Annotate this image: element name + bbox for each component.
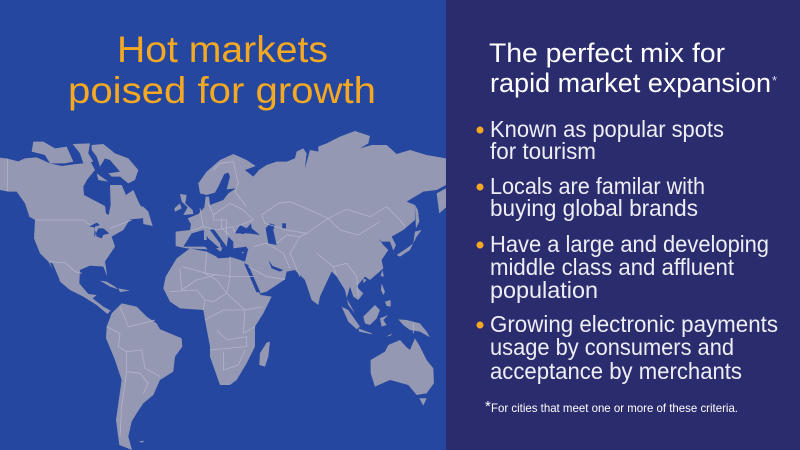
footnote: * <box>485 398 491 415</box>
bullet: electronic payments <box>476 311 778 384</box>
bullet: electronic payments: Growing electronic payments <box>490 311 778 337</box>
bullet: electronic payments: usage by consumers and <box>490 334 734 360</box>
title: poised for growth <box>68 70 376 111</box>
heading: perfect mix: * <box>772 73 777 88</box>
bullet: tourism: for tourism <box>490 138 596 164</box>
land masses <box>0 131 446 450</box>
mediterranean islands <box>204 232 244 253</box>
bullet: middle class <box>476 231 769 303</box>
country borders <box>7 159 413 437</box>
footnote: For cities that meet one or more of these criteria. <box>491 401 738 415</box>
bullet: global brands <box>476 173 705 221</box>
heading: perfect mix: The perfect mix for <box>489 38 725 68</box>
heading: perfect mix <box>489 38 777 98</box>
world map <box>0 131 446 450</box>
panel: left map background <box>0 0 446 450</box>
panel: right criteria background <box>446 0 800 450</box>
bullet: global brands: Locals are familar with <box>490 173 705 199</box>
bullet: middle class: middle class and affluent <box>490 254 735 280</box>
bullet: tourism <box>476 116 724 164</box>
bullet: global brands: buying global brands <box>490 195 698 221</box>
water bodies <box>50 223 286 293</box>
bullet: electronic payments: acceptance by merchants <box>490 358 742 384</box>
bullet: middle class: population <box>490 277 598 303</box>
title: Hot markets <box>117 29 328 70</box>
bullet: middle class: Have a large and developing <box>490 231 769 257</box>
title <box>68 29 376 111</box>
bullet: tourism: Known as popular spots <box>490 116 724 142</box>
heading: perfect mix: rapid market expansion <box>490 68 771 98</box>
